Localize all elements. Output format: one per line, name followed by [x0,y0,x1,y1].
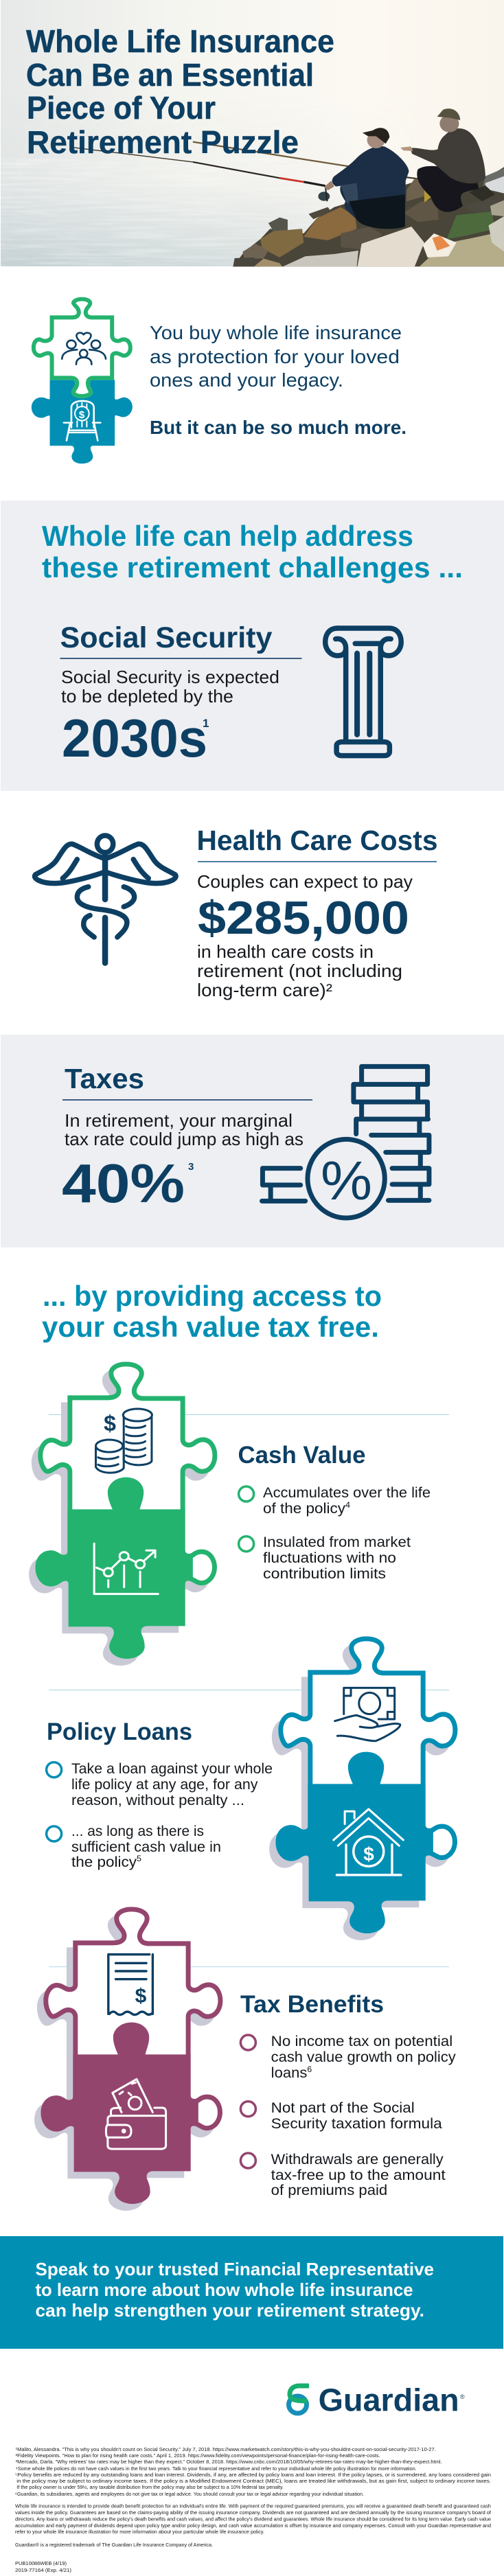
text: tax benefits: Security taxation formula [271,2115,442,2132]
footnotes and disclosures: ³Mercado, Darla. "Why retirees' tax rates may be higher than they expect." October 8, 2018. https://www.cnbc.com/2018/10/05/why-retirees-tax-rates-may-be-higher-than-they-expect.html. [16,2459,442,2465]
heading: cash value tax free: your cash value tax free. [42,1311,379,1343]
text: cash value: of the policy [263,1500,342,1517]
footnotes and disclosures: ⁶Guardian, its subsidiaries, agents and employees do not give tax or legal advice. You should consult your tax or legal advisor regarding your individual situation. [15,2491,364,2497]
icon: intro puzzle pieces with family and chair [32,297,133,463]
call to action band [0,2236,503,2349]
panel text: social security [60,621,302,768]
text: tax benefits: Tax Benefits [240,1991,384,2018]
panel text: health care costs [196,825,438,1000]
panel text: health care costs: retirement (not including [197,961,402,981]
call to action band: Speak to your trusted Financial Representative [36,2259,434,2279]
footnotes and disclosures: ⁴Some whole life polices do not have cash values in the first two years. Talk to your financial representative and refer to your individual whole life policy illustration for more information. [16,2465,417,2472]
panel text: social security: Social Security [60,621,273,654]
panel text: health care costs: in health care costs in [197,941,374,962]
text: policy loans: Take a loan against your whole [71,1760,273,1777]
text: tax benefits: 6 [307,2065,312,2074]
footnotes and disclosures: If the policy owner is under 59½, any taxable distribution from the policy may also be subject to a 10% federal tax penalty. [16,2484,284,2490]
icon: coin stacks with percent: % [321,1150,372,1211]
heading: retirement challenges: these retirement challenges ... [42,551,463,584]
title: Can Be an Essential [26,57,314,93]
text: policy loans: Policy Loans [47,1718,192,1745]
text: tax benefits [240,1991,456,2198]
icon: dollar sign on chair: $ [79,409,85,421]
title [26,23,334,160]
puzzle: tax benefits [34,1907,222,2216]
title: Piece of Your [27,90,216,126]
panel text: health care costs: Couples can expect to pay [197,871,413,892]
footnotes and disclosures: accumulation and early payment of dividends depend upon policy type and/or policy design, and cash value accumulation is offset by insurance and company expenses. Consult with your Guardian representative and [15,2522,491,2529]
text: cash value: Insulated from market [263,1534,411,1550]
panel text: social security: to be depleted by the [61,686,233,706]
call to action band: to learn more about how whole life insurance [36,2279,413,2300]
footnotes and disclosures: refer to your whole life insurance illustration for more information about your particular whole life insurance policy. [15,2529,264,2535]
panel text: taxes: 40% [62,1153,185,1214]
panel text: taxes [62,1063,312,1214]
panel text: social security: Social Security is expected [61,667,279,687]
heading: retirement challenges [42,520,463,584]
hero photo: men fishing on rocks [1,0,504,266]
text: policy loans: the policy [71,1854,134,1870]
panel text: taxes: tax rate could jump as high as [65,1129,303,1149]
puzzle: cash value [29,1361,217,1670]
intro text: ones and your legacy. [150,369,343,391]
panel text: health care costs: long-term care)² [197,980,332,1000]
icon: column [325,628,401,756]
footnotes and disclosures: in the policy may be subject to ordinary income taxes. If the policy is a Modified Endowment Contract (MEC), loans are treated like withdrawals, but as gain first, subject to ordinary income taxes. [16,2478,491,2484]
text: policy loans: sufficient cash value in [71,1839,221,1855]
intro text: But it can be so much more. [150,417,406,438]
icon: dollar sign by coins: $ [104,1411,116,1436]
footnotes and disclosures: ⁵Policy benefits are reduced by any outstanding loans and loan interest. Dividends, if any, are affected by policy loans and loan interest. If the policy lapses, or is surrendered, any loans considered gain [15,2472,491,2478]
text: cash value: Cash Value [238,1442,365,1469]
footnotes and disclosures: ¹Malito, Alessandra. "This is why you shouldn't count on Social Security." July 7, 2018. https://www.marketwatch.com/story/this-is-why-you-shouldnt-count-on-social-security-2017-10-27. [16,2446,436,2452]
footnotes and disclosures: 2019-77164 (Exp. 4/21) [15,2567,71,2573]
text: policy loans: ... as long as there is [71,1823,204,1839]
text: tax benefits: Not part of the Social [271,2100,415,2116]
intro text [150,322,406,438]
panel text: taxes: 3 [188,1161,194,1173]
logo: Guardian: ® [460,2393,465,2400]
puzzle: policy loans [269,1636,457,1945]
panel text: taxes: Taxes [65,1063,144,1094]
footnotes and disclosures: Guardian® is a registered trademark of The Guardian Life Insurance Company of America. [15,2542,213,2548]
text: cash value: 4 [345,1500,350,1510]
text: cash value: fluctuations with no [263,1550,396,1566]
heading: retirement challenges: Whole life can help address [42,520,413,552]
intro text: as protection for your loved [150,346,400,367]
footnotes and disclosures: values inside the policy. Guarantees are based on the claims-paying ability of the issuing insurance company. Dividends are not guaranteed and are declared annually by the issuing insurance company's board of [15,2509,491,2516]
text: cash value [238,1442,431,1582]
text: policy loans: reason, without penalty ... [71,1792,244,1808]
title: Retirement Puzzle [27,124,299,160]
title: Whole Life Insurance [26,23,334,59]
panel text: social security: 2030s [62,708,207,768]
panel text: social security: 1 [203,717,209,730]
icon: dollar sign on receipt: $ [135,1985,147,2008]
heading: cash value tax free [42,1280,382,1343]
panel text: health care costs: $285,000 [198,892,409,944]
text: tax benefits: Withdrawals are generally [271,2151,444,2167]
text: tax benefits: loans [271,2065,306,2081]
panel: social security background [1,501,504,791]
text: tax benefits: tax-free up to the amount [271,2167,446,2183]
panel text: taxes: In retirement, your marginal [65,1110,293,1131]
logo: Guardian: Guardian [319,2382,459,2418]
panel text: health care costs: Health Care Costs [196,825,438,856]
text: tax benefits: of premiums paid [271,2182,387,2198]
text: tax benefits: cash value growth on policy [271,2049,456,2065]
text: cash value: contribution limits [263,1565,386,1582]
icon: dollar sign in house: $ [363,1843,374,1865]
intro text: You buy whole life insurance [150,322,402,343]
text: policy loans [47,1718,273,1870]
heading: cash value tax free: ... by providing access to [43,1280,382,1312]
footnotes and disclosures: Whole life insurance is intended to provide death benefit protection for an individual's entire life. With payment of the required guaranteed premiums, you will receive a guaranteed death benefit and guaranteed cash [15,2503,491,2509]
icon: caduceus [35,836,176,963]
footnotes and disclosures: directors. Any loans or withdrawals reduce the policy's death benefits and cash values, and affect the policy's dividend and guarantees. Whole life insurance should be considered for its long term value. Early cash value [15,2516,491,2522]
footnotes and disclosures: ²Fidelity Viewpoints. "How to plan for rising health care costs." April 1, 2019. https://www.fidelity.com/viewpoints/personal-finance/plan-for-rising-health-care-costs. [16,2452,380,2459]
call to action band: can help strengthen your retirement strategy. [36,2300,424,2321]
text: cash value: Accumulates over the life [263,1484,431,1501]
text: tax benefits: No income tax on potential [271,2033,453,2049]
footnotes and disclosures [15,2446,491,2573]
panel: taxes background [1,1035,504,1247]
icon: coin stacks with percent [262,1066,429,1218]
text: policy loans: life policy at any age, for any [71,1776,258,1793]
text: policy loans: 5 [137,1854,141,1863]
footnotes and disclosures: PUB10086WEB (4/19) [15,2560,67,2566]
